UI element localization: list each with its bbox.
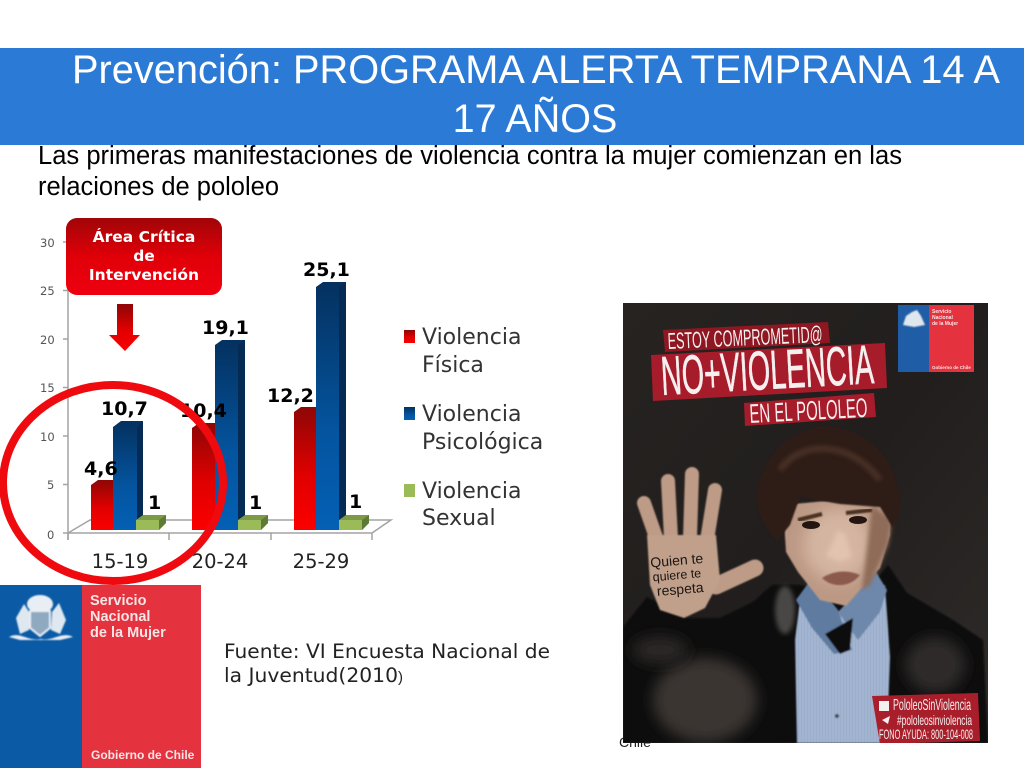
logo text: Gobierno de Chile (91, 748, 195, 762)
bar chart: 5 (47, 478, 54, 492)
data labels: 25,1 (303, 259, 350, 281)
arrow: pointing down to critical area (109, 304, 140, 351)
banner: en el pololeo (744, 393, 876, 429)
callout: área crítica de intervención (66, 218, 222, 295)
data labels: 1 (148, 492, 161, 514)
bar chart: 25 (40, 284, 55, 298)
data labels (84, 259, 362, 514)
banner: estoy comprometid@ (663, 321, 830, 354)
bar chart: 0 (47, 528, 54, 542)
poster logo: Gobierno de Chile (932, 365, 971, 370)
hand (644, 474, 755, 618)
bar chart: 30 (40, 236, 55, 250)
shirt (795, 572, 890, 743)
nose and mouth (828, 532, 850, 560)
bar chart: 20 (40, 333, 55, 347)
source note: ) (398, 669, 403, 686)
intro text: relaciones de pololeo (38, 173, 279, 201)
legend: Violencia (422, 402, 521, 427)
red circle highlight (3, 385, 223, 581)
poster logo (898, 305, 974, 372)
title band (0, 48, 1024, 145)
poster logo: de la Mujer (932, 321, 958, 327)
legend: Violencia (422, 479, 521, 504)
legend: Física (422, 353, 484, 378)
hand writing: respeta (656, 579, 704, 599)
eyes (798, 510, 872, 520)
legend (404, 325, 543, 531)
title second line: 17 AÑOS (453, 97, 617, 141)
data labels: 4,6 (84, 458, 118, 480)
poster contact box (872, 693, 980, 744)
bars: 25-29 (294, 282, 369, 530)
category labels (92, 550, 349, 573)
logo text: de la Mujer (90, 625, 166, 641)
banner: estoy comprometid@: ESTOY COMPROMETID@ (667, 321, 823, 354)
source note: la Juventud(2010 (224, 664, 398, 687)
poster contact box: #pololeosinviolencia (897, 712, 972, 728)
legend: Violencia (422, 325, 521, 350)
callout: área crítica de intervención: de (133, 247, 155, 265)
logo text: Servicio (90, 593, 147, 609)
head and hair (757, 426, 900, 606)
banner: en el pololeo: EN EL POLOLEO (749, 393, 868, 429)
hair (757, 426, 900, 541)
legend: Psicológica (422, 430, 543, 455)
hand writing (651, 554, 704, 598)
callout: área crítica de intervención: Área Crítica (93, 227, 195, 246)
logo text: Nacional (90, 609, 150, 625)
bar chart (40, 236, 391, 573)
source note (224, 640, 550, 687)
intro text: Las primeras manifestaciones de violencia contra la mujer comienzan en las (38, 142, 902, 170)
callout: área crítica de intervención: Intervención (89, 266, 199, 284)
icon: coat of arms (9, 595, 73, 640)
hand writing: Quien te (650, 550, 704, 570)
banner: no+violencia (651, 343, 887, 401)
intro text (38, 142, 902, 201)
campaign poster photo (623, 303, 988, 744)
bar chart: 10 (40, 430, 55, 444)
jacket (623, 565, 988, 743)
hand writing: quiere te (652, 566, 702, 584)
poster logo: Nacional (932, 315, 953, 321)
category labels: 25-29 (293, 550, 349, 573)
bars: 20-24 (192, 340, 268, 530)
data labels: 1 (249, 492, 262, 514)
bar chart: 15 (40, 381, 55, 395)
bars: 15-19 (91, 421, 166, 530)
category labels: 15-19 (92, 550, 148, 573)
data labels: 1 (349, 491, 362, 513)
title: Prevención: PROGRAMA ALERTA TEMPRANA 14 A (72, 48, 1000, 92)
legend: Sexual (422, 506, 496, 531)
logo: Servicio Nacional de la Mujer (0, 585, 201, 768)
source note: Fuente: VI Encuesta Nacional de (224, 640, 550, 663)
poster logo: Servicio (932, 309, 951, 315)
data labels: 19,1 (202, 317, 249, 339)
data labels: 10,4 (180, 400, 227, 422)
footer text partly hidden: Chile (619, 734, 651, 750)
category labels: 20-24 (192, 550, 248, 573)
data labels: 12,2 (267, 385, 314, 407)
logo text (90, 593, 195, 762)
data labels: 10,7 (101, 398, 148, 420)
